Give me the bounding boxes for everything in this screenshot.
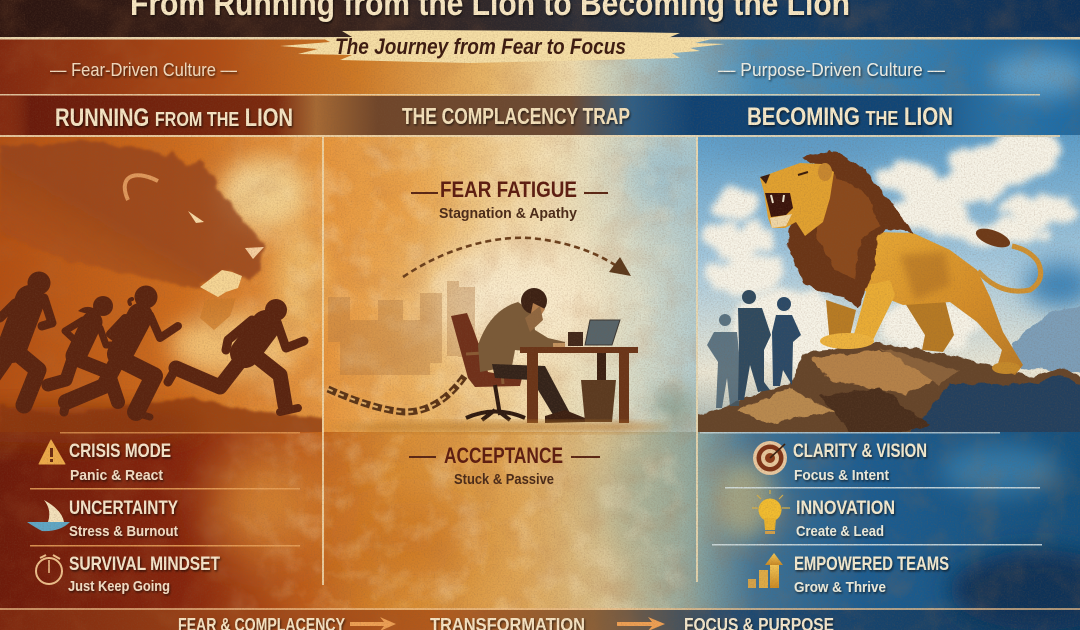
tail [974, 225, 1041, 291]
list: purpose-driven traits [700, 432, 1042, 596]
dashed arrow [403, 238, 631, 277]
laptop and mug [553, 320, 620, 347]
trait: empowered teams: Grow & Thrive [794, 579, 886, 596]
worker [478, 288, 585, 423]
subtitle brush banner [280, 30, 725, 63]
heading: running from the lion: RUNNING FROM THE LION [55, 104, 293, 132]
far legs [903, 300, 954, 352]
heading: fear fatigue: FEAR FATIGUE [440, 177, 577, 202]
waste bin [581, 380, 616, 422]
ground under runners [0, 396, 322, 432]
heading: the complacency trap: THE COMPLACENCY TRAP [402, 103, 630, 129]
trait: clarity and vision: Focus & Intent [794, 467, 889, 484]
heading: acceptance: Stuck & Passive [454, 471, 554, 488]
runner 4 [168, 299, 304, 412]
bottom transformation strip [0, 608, 1080, 630]
label: purpose-driven culture: — Purpose-Driven Culture — [718, 60, 945, 80]
trait: empowered teams: EMPOWERED TEAMS [794, 554, 949, 575]
arrow [617, 617, 665, 630]
light mottling [228, 137, 684, 609]
trait: crisis mode: CRISIS MODE [69, 441, 171, 462]
team member 1 [707, 314, 741, 408]
team member 3 [772, 297, 801, 386]
heading: acceptance [409, 443, 600, 488]
face [760, 163, 834, 236]
illustration: lion shadow [0, 140, 266, 330]
heading: fear fatigue [411, 177, 608, 222]
illustration: running figures [0, 272, 304, 417]
label: fear-driven culture: — Fear-Driven Culture — [50, 60, 237, 80]
illustration: rock outcrop [698, 342, 1080, 432]
trait: innovation [752, 490, 895, 540]
mane [787, 150, 913, 308]
open mouth [765, 193, 793, 217]
runner 3 [64, 286, 178, 417]
illustration: distant mountains [1010, 306, 1080, 372]
body [862, 232, 1023, 375]
arrow [350, 617, 396, 630]
illustration: leadership team silhouettes [707, 290, 801, 408]
heading: fear fatigue: Stagnation & Apathy [439, 205, 578, 222]
trait: survival mindset: SURVIVAL MINDSET [69, 554, 220, 575]
trait: crisis mode [39, 440, 171, 484]
trait: survival mindset [36, 554, 220, 595]
runner 2 [48, 296, 118, 402]
clouds [703, 132, 1080, 370]
heading: acceptance: ACCEPTANCE [444, 443, 563, 468]
runner 1 [0, 272, 52, 405]
trait: clarity and vision: CLARITY & VISION [793, 441, 927, 462]
list: fear-driven traits [27, 432, 300, 595]
trait: clarity and vision [753, 441, 927, 484]
subtitle brush banner: The Journey from Fear to Focus [335, 34, 626, 59]
trait: crisis mode: Panic & React [70, 467, 163, 484]
skyline [328, 281, 475, 375]
trait: uncertainty: Stress & Burnout [69, 523, 178, 540]
floor [330, 422, 670, 432]
illustration: roaring lion [760, 150, 1041, 375]
team member 2 [738, 290, 771, 400]
desk [520, 347, 638, 423]
column header band [0, 94, 1060, 137]
chair [451, 313, 525, 420]
trait: empowered teams [748, 553, 949, 596]
trait: innovation: Create & Lead [796, 523, 884, 540]
front leg [853, 280, 895, 340]
trait: innovation: INNOVATION [796, 498, 895, 519]
top rule [0, 37, 1080, 40]
heading: becoming the lion: BECOMING THE LION [747, 103, 953, 131]
trait: uncertainty: UNCERTAINTY [69, 498, 178, 519]
trait: survival mindset: Just Keep Going [68, 578, 170, 595]
trait: uncertainty [27, 498, 178, 540]
chain [328, 374, 466, 412]
column dividers [322, 137, 698, 585]
illustration: chained worker at desk [328, 238, 670, 432]
sky panel [698, 131, 1080, 432]
